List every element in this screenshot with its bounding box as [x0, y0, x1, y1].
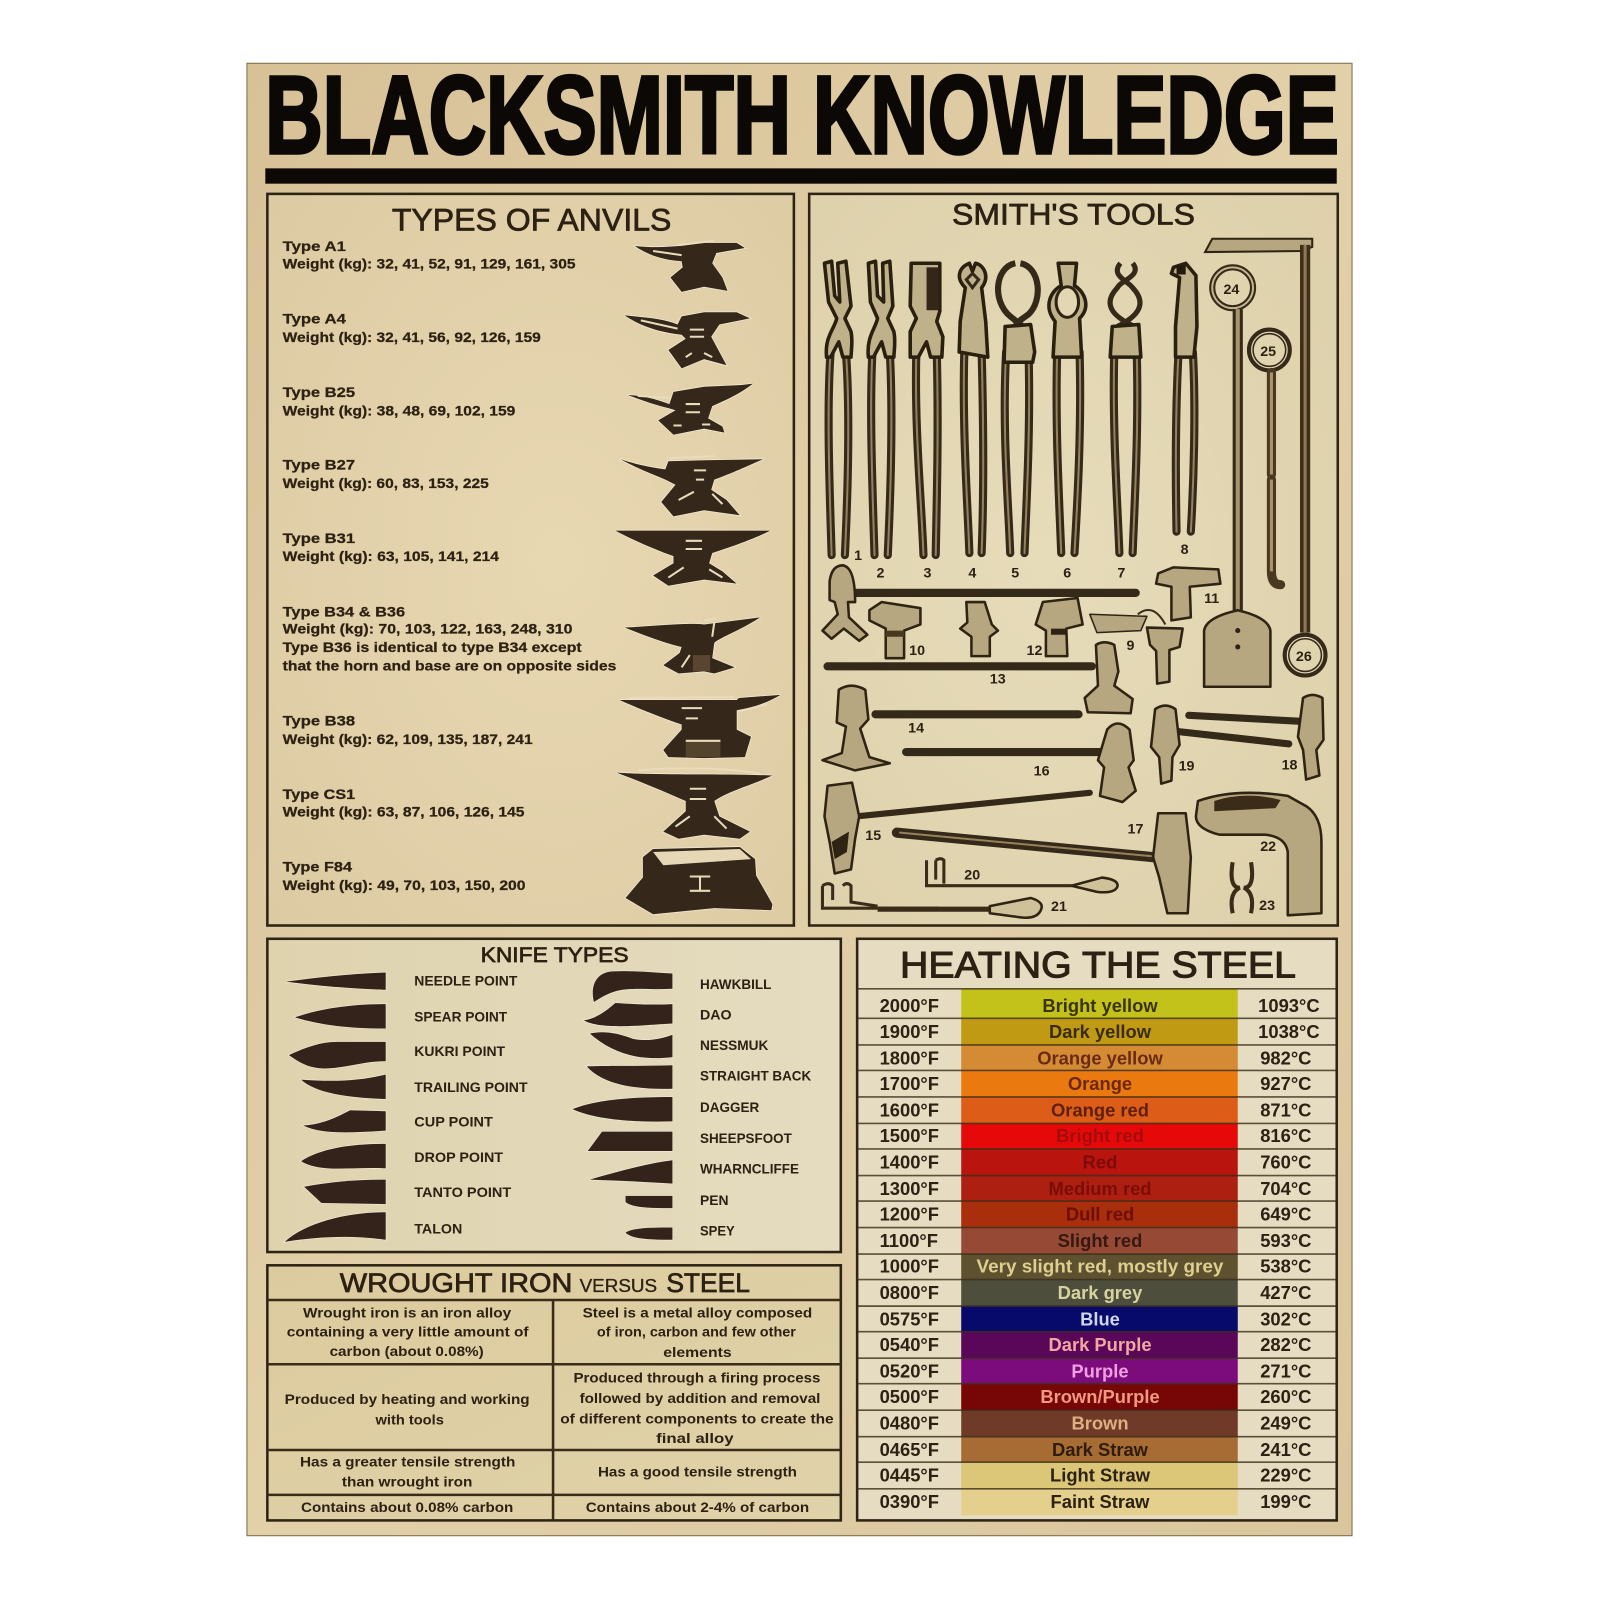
wrought iron column text: Produced by heating and working	[285, 1392, 530, 1408]
tool number labels	[854, 542, 1298, 915]
knife blades left column	[285, 972, 386, 1242]
celsius column: 538°C	[1260, 1255, 1311, 1276]
panel: smith's tools	[809, 194, 1338, 926]
fahrenheit column: 0390°F	[880, 1491, 939, 1512]
icon: tool 11	[1156, 567, 1220, 620]
colour names: Dark yellow	[1049, 1021, 1152, 1042]
celsius column: 249°C	[1260, 1413, 1311, 1434]
icon: hammer 15	[824, 783, 1090, 873]
icon: tong 5	[998, 263, 1038, 553]
wrought iron column text: Wrought iron is an iron alloy	[303, 1305, 511, 1321]
colour names: Dull red	[1066, 1203, 1134, 1224]
wrought iron column text: with tools	[374, 1412, 444, 1428]
anvil text list: Type A4	[283, 311, 346, 327]
fahrenheit column: 0480°F	[880, 1413, 939, 1434]
colour names: Dark Purple	[1048, 1334, 1152, 1355]
anvil text list: Weight (kg): 63, 105, 141, 214	[283, 549, 499, 565]
icon: hammer top	[822, 565, 1136, 641]
knife labels right column: SPEY	[700, 1224, 735, 1239]
anvil text list: Type B31	[283, 531, 355, 547]
icon: hook bar 26: 26	[1296, 649, 1312, 665]
colour names: Medium red	[1048, 1178, 1152, 1199]
knife labels right column: DAGGER	[700, 1100, 759, 1115]
icon: tong 8	[1171, 263, 1197, 532]
celsius column: 302°C	[1260, 1309, 1311, 1330]
icon: anvil F84	[626, 847, 772, 914]
fahrenheit column: 1300°F	[880, 1178, 939, 1199]
tool number labels: 5	[1011, 566, 1019, 582]
tool number labels: 22	[1260, 839, 1276, 855]
colour names: Dark grey	[1058, 1282, 1143, 1303]
tool number labels: 3	[923, 566, 931, 582]
celsius column: 927°C	[1260, 1073, 1311, 1094]
knife labels right column: DAO	[700, 1007, 732, 1022]
knife labels left column: DROP POINT	[414, 1150, 504, 1165]
knife labels right column: STRAIGHT BACK	[700, 1069, 811, 1084]
knife labels left column: NEEDLE POINT	[414, 974, 518, 989]
fahrenheit column: 1000°F	[880, 1255, 939, 1276]
knife labels right column: PEN	[700, 1193, 729, 1208]
fahrenheit column: 0445°F	[880, 1465, 939, 1486]
celsius column: 229°C	[1260, 1465, 1311, 1486]
knife labels left column: KUKRI POINT	[414, 1044, 506, 1059]
anvil text list: Weight (kg): 49, 70, 103, 150, 200	[283, 878, 526, 894]
icon: anvil B25	[628, 384, 753, 435]
heading: wrought iron versus steel	[340, 1268, 750, 1298]
anvil text list: Weight (kg): 32, 41, 56, 92, 126, 159	[283, 330, 541, 346]
colour names: Orange yellow	[1037, 1047, 1163, 1068]
tool number labels: 6	[1063, 566, 1071, 582]
fahrenheit column: 1200°F	[880, 1203, 939, 1224]
colour names: Faint Straw	[1051, 1491, 1150, 1512]
icon: tong 1	[824, 261, 852, 555]
fahrenheit column: 1700°F	[880, 1073, 939, 1094]
icon: tongs clip 23	[1232, 862, 1252, 913]
celsius column: 260°C	[1260, 1386, 1311, 1407]
anvil text list: Weight (kg): 60, 83, 153, 225	[283, 476, 489, 492]
icon: anvil A1	[635, 241, 745, 292]
icon: anvil B38	[619, 695, 781, 758]
fahrenheit column: 0540°F	[880, 1334, 939, 1355]
fahrenheit column: 1900°F	[880, 1021, 939, 1042]
wrought iron column text: carbon (about 0.08%)	[330, 1344, 484, 1360]
panel: knife types	[267, 939, 841, 1252]
icon: poker 25	[1249, 330, 1290, 585]
panel: heating the steel	[857, 939, 1337, 1520]
fahrenheit column: 0465°F	[880, 1439, 939, 1460]
icon: hammer 19	[1151, 706, 1289, 784]
icon: tong 2	[868, 261, 895, 555]
icon: shovel 24	[1204, 267, 1270, 687]
anvil text list: Weight (kg): 62, 109, 135, 187, 241	[283, 732, 533, 748]
steel column text: followed by addition and removal	[580, 1391, 820, 1407]
anvil text list: Weight (kg): 70, 103, 122, 163, 248, 310	[283, 622, 573, 638]
fahrenheit column: 1500°F	[880, 1125, 939, 1146]
panel: types of anvils	[267, 194, 794, 926]
tool number labels: 10	[909, 643, 925, 659]
icon: tong 6	[1049, 263, 1086, 553]
celsius column: 241°C	[1260, 1439, 1311, 1460]
heading: smith's tools: SMITH'S TOOLS	[952, 198, 1195, 231]
knife labels left column: TRAILING POINT	[414, 1080, 528, 1095]
icon: hook bar 26	[1205, 239, 1326, 676]
icon: hammer 14	[822, 686, 1079, 770]
steel column text: Steel is a metal alloy composed	[583, 1305, 812, 1321]
colour names	[977, 995, 1224, 1512]
tool number labels: 7	[1117, 566, 1125, 582]
wrought iron column text: Has a greater tensile strength	[300, 1454, 515, 1470]
fahrenheit column: 1600°F	[880, 1099, 939, 1120]
tool number labels: 2	[877, 566, 885, 582]
heading: types of anvils: TYPES OF ANVILS	[392, 202, 671, 238]
colour names: Orange	[1068, 1073, 1132, 1094]
tool number labels: 18	[1282, 757, 1298, 773]
tool number labels: 14	[908, 721, 924, 737]
tool number labels: 21	[1051, 899, 1067, 915]
icon: poker 25: 25	[1260, 344, 1276, 360]
tool number labels: 20	[964, 868, 980, 884]
icon: fork 21	[822, 884, 1042, 918]
knife labels right column: SHEEPSFOOT	[700, 1131, 792, 1146]
steel column text	[560, 1305, 834, 1516]
fahrenheit column: 0800°F	[880, 1282, 939, 1303]
tool number labels: 17	[1128, 822, 1143, 838]
fahrenheit column: 1800°F	[880, 1047, 939, 1068]
tool number labels: 15	[865, 828, 881, 844]
celsius column: 282°C	[1260, 1334, 1311, 1355]
knife labels right column	[700, 977, 811, 1239]
icon: swage middle	[960, 602, 998, 656]
colour names: Purple	[1071, 1361, 1129, 1382]
anvil text list: Type B36 is identical to type B34 except	[283, 640, 582, 656]
knife labels left column: TANTO POINT	[414, 1185, 512, 1200]
celsius column: 593°C	[1260, 1230, 1311, 1251]
celsius column: 816°C	[1260, 1125, 1311, 1146]
knife labels right column: WHARNCLIFFE	[700, 1161, 799, 1176]
knife labels left column: TALON	[414, 1222, 462, 1237]
celsius column: 1038°C	[1258, 1021, 1320, 1042]
heading: knife types: KNIFE TYPES	[481, 943, 629, 967]
colour names: Very slight red, mostly grey	[977, 1255, 1224, 1276]
icon: hammer 18	[1189, 695, 1323, 780]
anvil text list: Type B38	[283, 714, 355, 730]
celsius column: 871°C	[1260, 1099, 1311, 1120]
tool number labels: 13	[990, 672, 1006, 688]
icon: tong 4	[959, 263, 988, 553]
celsius column: 427°C	[1260, 1282, 1311, 1303]
icon: tong 3	[910, 263, 943, 555]
icon: anvil CS1	[616, 768, 772, 839]
icon: swage 12	[1036, 598, 1083, 656]
icon: bit 9	[1090, 610, 1183, 684]
steel column text: of iron, carbon and few other	[597, 1325, 796, 1341]
colour names: Blue	[1080, 1309, 1120, 1330]
tool number labels: 1	[854, 548, 862, 564]
celsius column: 982°C	[1260, 1047, 1311, 1068]
steel column text: Produced through a firing process	[573, 1371, 820, 1387]
fahrenheit column	[880, 995, 939, 1512]
tool number labels: 19	[1179, 758, 1195, 774]
colour names: Orange red	[1051, 1099, 1149, 1120]
colour names: Bright red	[1056, 1125, 1144, 1146]
icon: shovel 24: 24	[1223, 282, 1239, 298]
fahrenheit column: 2000°F	[880, 995, 939, 1016]
steel column text: of different components to create the	[560, 1411, 834, 1427]
colour names: Slight red	[1058, 1230, 1142, 1251]
colour names: Brown	[1071, 1413, 1129, 1434]
colour names: Light Straw	[1050, 1465, 1151, 1486]
anvil text list: Type F84	[283, 859, 352, 875]
heading: wrought iron versus steel: STEEL	[666, 1268, 750, 1298]
icon: anvil B34	[624, 617, 760, 673]
anvil text list: Type B34 & B36	[283, 604, 405, 620]
tool number labels: 11	[1204, 591, 1219, 607]
wrought iron column text: containing a very little amount of	[287, 1325, 529, 1341]
anvil text list: Type CS1	[283, 787, 355, 803]
anvil text list: Type B27	[283, 457, 355, 473]
steel column text: Contains about 2-4% of carbon	[586, 1500, 809, 1516]
fahrenheit column: 0520°F	[880, 1361, 939, 1382]
title rule	[265, 168, 1337, 184]
icon: swage 10	[869, 602, 920, 658]
icon: hammer 13	[828, 642, 1133, 713]
steel column text: Has a good tensile strength	[598, 1465, 797, 1481]
anvil text list: that the horn and base are on opposite sides	[283, 658, 616, 674]
colour names: Red	[1083, 1151, 1117, 1172]
wrought iron column text	[285, 1305, 530, 1516]
celsius column: 271°C	[1260, 1361, 1311, 1382]
knife labels left column	[414, 974, 528, 1237]
knife labels right column: NESSMUK	[700, 1038, 768, 1053]
anvil text list: Type A1	[283, 239, 346, 255]
poster background	[247, 63, 1352, 1536]
fahrenheit column: 0500°F	[880, 1386, 939, 1407]
anvil text list: Weight (kg): 32, 41, 52, 91, 129, 161, 305	[283, 256, 576, 272]
fahrenheit column: 0575°F	[880, 1309, 939, 1330]
tool number labels: 12	[1027, 643, 1042, 659]
celsius column: 704°C	[1260, 1178, 1311, 1199]
knife labels right column: HAWKBILL	[700, 977, 771, 992]
wrought iron column text: Contains about 0.08% carbon	[301, 1500, 513, 1516]
knife blades right column	[572, 971, 672, 1240]
fahrenheit column: 1400°F	[880, 1151, 939, 1172]
icon: fork 20	[927, 859, 1118, 892]
anvil text list: Weight (kg): 38, 48, 69, 102, 159	[283, 403, 515, 419]
wrought iron column text: than wrought iron	[342, 1475, 472, 1491]
panel: wrought iron versus steel	[267, 1265, 841, 1520]
colour names: Brown/Purple	[1040, 1386, 1160, 1407]
icon: tool 22	[1196, 793, 1321, 915]
tool number labels: 4	[968, 566, 976, 582]
colour names: Bright yellow	[1042, 995, 1158, 1016]
colour names: Dark Straw	[1052, 1439, 1149, 1460]
tool number labels: 16	[1034, 764, 1050, 780]
icon: anvil B31	[615, 531, 770, 586]
icon: anvil B27	[620, 456, 763, 516]
fahrenheit column: 1100°F	[880, 1230, 938, 1251]
celsius column: 760°C	[1260, 1151, 1311, 1172]
celsius column: 1093°C	[1258, 995, 1320, 1016]
tool number labels: 23	[1259, 898, 1275, 914]
tool number labels: 9	[1127, 638, 1135, 654]
celsius column: 199°C	[1260, 1491, 1311, 1512]
heading: wrought iron versus steel: WROUGHT IRON	[340, 1268, 572, 1298]
heading: heating the steel: HEATING THE STEEL	[900, 945, 1296, 986]
celsius column	[1258, 995, 1320, 1512]
colour bands	[961, 989, 1238, 1515]
heading: wrought iron versus steel: VERSUS	[580, 1275, 657, 1296]
tool number labels: 8	[1181, 542, 1189, 558]
anvil text list: Weight (kg): 63, 87, 106, 126, 145	[283, 804, 525, 820]
icon: tong 7	[1110, 263, 1141, 553]
celsius column: 649°C	[1260, 1203, 1311, 1224]
steel column text: elements	[663, 1345, 732, 1361]
anvil text list	[283, 239, 616, 894]
icon: anvil A4	[624, 312, 750, 368]
knife labels left column: SPEAR POINT	[414, 1009, 508, 1024]
knife labels left column: CUP POINT	[414, 1115, 493, 1130]
icon: hammer 16	[906, 723, 1136, 802]
anvil text list: Type B25	[283, 385, 355, 401]
steel column text: final alloy	[656, 1431, 734, 1447]
icon: hammer 17	[897, 813, 1191, 913]
